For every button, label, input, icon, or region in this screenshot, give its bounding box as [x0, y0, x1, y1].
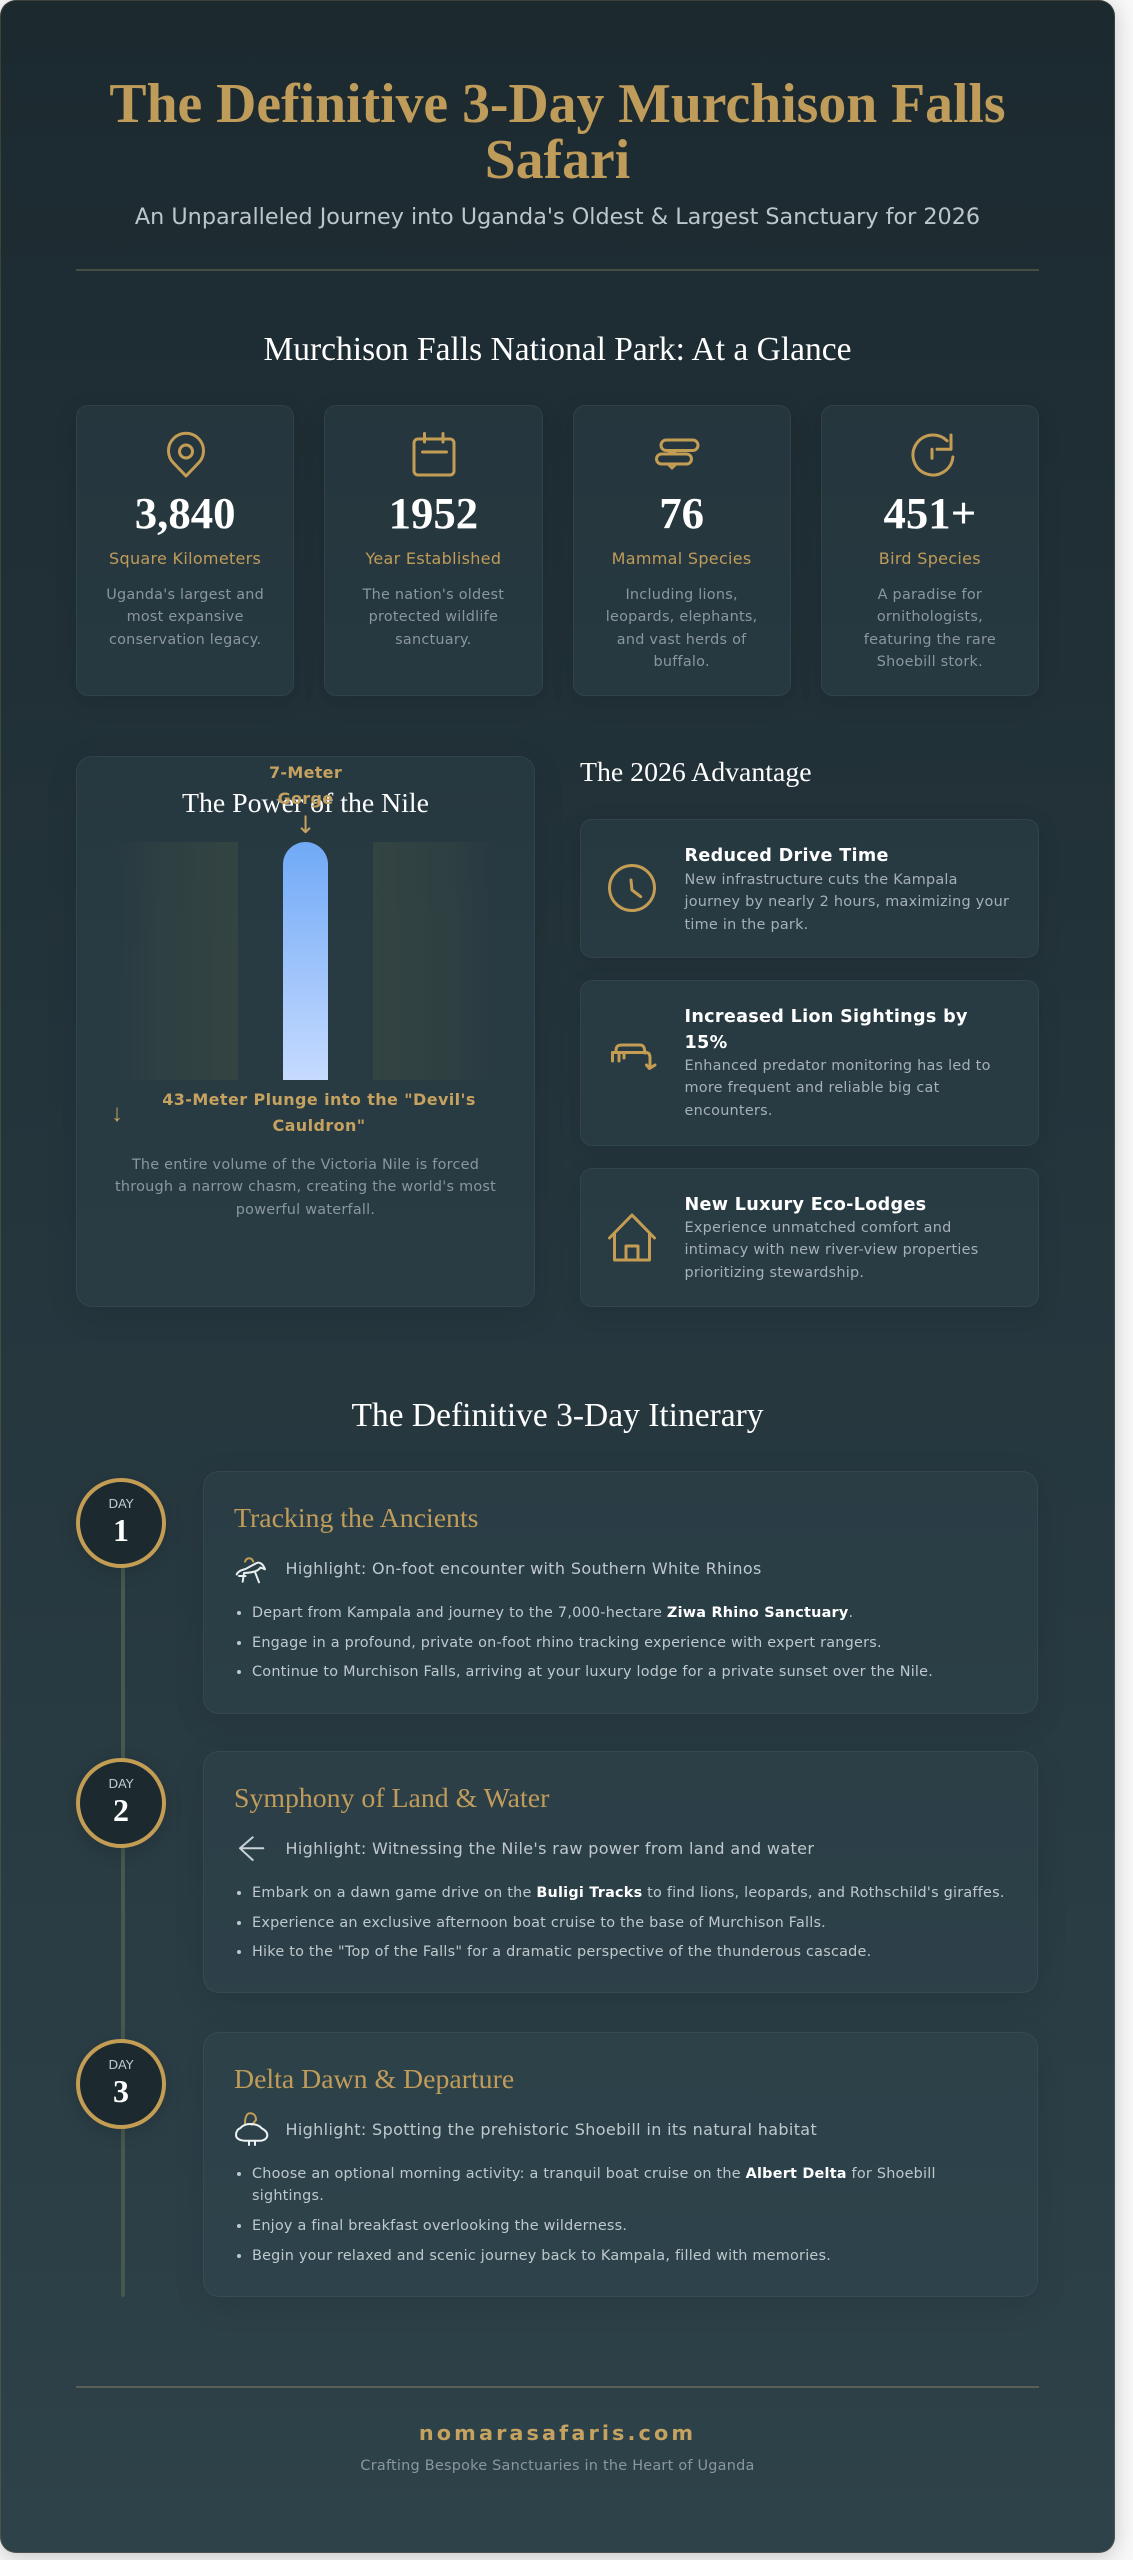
arrow: plunge down: ↓ — [111, 1100, 123, 1127]
stat description: buffalo. — [653, 654, 710, 670]
stat description — [362, 587, 504, 648]
timeline line — [121, 1560, 124, 2297]
stat description — [864, 587, 996, 670]
day caption: DAY — [108, 1777, 134, 1792]
stat description: Shoebill stork. — [877, 654, 983, 670]
advantage description — [684, 1220, 979, 1281]
advantage description: encounters. — [684, 1103, 773, 1119]
stat description: protected wildlife — [369, 609, 498, 625]
stat description: The nation's oldest — [363, 587, 504, 603]
activity list: Continue to Murchison Falls, arriving at your luxury lodge for a private sunset over the Nile. — [252, 1664, 933, 1680]
stat description: Including lions, — [625, 587, 738, 603]
highlight text: Highlight: On-foot encounter with Southern White Rhinos — [286, 1559, 762, 1578]
day title: Tracking the Ancients — [234, 1503, 478, 1534]
stat description: featuring the rare — [864, 632, 996, 648]
activity list: Embark on a dawn game drive on the Buligi Tracks to find lions, leopards, and Rothschild's giraffes. — [252, 1885, 1005, 1901]
icon: house — [608, 1213, 656, 1262]
icon: clock — [608, 864, 656, 912]
stat label: Bird Species — [879, 549, 981, 568]
timeline marker: day 1 — [76, 1478, 166, 1568]
stat description: Uganda's largest and — [106, 587, 264, 603]
panel: bird species stat — [821, 405, 1039, 696]
advantage description — [684, 1058, 991, 1119]
advantage description: prioritizing stewardship. — [684, 1265, 864, 1281]
stat number: 3,840 — [135, 488, 236, 538]
timeline marker: day 2 — [76, 1758, 166, 1848]
advantage title: Increased Lion Sightings by 15% — [684, 1007, 968, 1053]
panel: day 3 — [203, 2032, 1038, 2297]
panel: the power of the nile — [76, 756, 535, 1307]
timeline marker: day 3 — [76, 2039, 166, 2129]
icon: bird circular arrow — [911, 434, 954, 477]
description: nile: The entire volume of the Victoria Nile is forced — [132, 1157, 479, 1173]
advantage description: time in the park. — [684, 917, 808, 933]
footer: tagline: Crafting Bespoke Sanctuaries in the Heart of Uganda — [360, 2458, 755, 2474]
stat label: Square Kilometers — [109, 549, 261, 568]
day number: 3 — [113, 2073, 129, 2109]
panel: reduced drive time — [580, 819, 1039, 958]
label: 43-meter plunge: 43-Meter Plunge into the "Devil's — [162, 1090, 476, 1109]
activity list — [237, 1605, 933, 1680]
heading: at a glance: Murchison Falls National Park: At a Glance — [263, 331, 852, 368]
highlight text: Highlight: Spotting the prehistoric Shoebill in its natural habitat — [286, 2120, 817, 2139]
day number: 2 — [113, 1792, 129, 1828]
panel: year established stat — [324, 405, 542, 696]
panel: square kilometers stat — [76, 405, 294, 696]
title: The Definitive 3-Day Murchison Falls Safari — [109, 73, 1006, 191]
icon: stacked animal shape — [655, 438, 700, 470]
icon: shoebill cloud — [235, 2112, 268, 2146]
stat description: leopards, elephants, — [606, 609, 757, 625]
panel: day 1 — [203, 1471, 1038, 1714]
panel: day 2 — [203, 1751, 1038, 1993]
activity list: Choose an optional morning activity: a tranquil boat cruise on the Albert Delta for Shoebill — [252, 2166, 936, 2182]
advantage description — [684, 872, 1009, 933]
advantage description: intimacy with new river-view properties — [684, 1242, 979, 1258]
advantage description: New infrastructure cuts the Kampala — [684, 872, 958, 888]
icon: lion — [611, 1044, 657, 1070]
stat description — [106, 587, 264, 648]
stat description: conservation legacy. — [109, 632, 261, 648]
panel: new luxury eco-lodges — [580, 1168, 1039, 1307]
day caption: DAY — [108, 2058, 134, 2073]
activity list — [237, 2166, 936, 2264]
diagram: waterfall — [283, 842, 328, 1080]
day title: Delta Dawn & Departure — [234, 2064, 514, 2095]
stat number: 76 — [659, 488, 704, 538]
activity list: Experience an exclusive afternoon boat cruise to the base of Murchison Falls. — [252, 1915, 826, 1931]
heading: the 2026 advantage: The 2026 Advantage — [580, 757, 812, 788]
activity list: Enjoy a final breakfast overlooking the wilderness. — [252, 2218, 627, 2234]
description: nile: through a narrow chasm, creating the world's most — [115, 1179, 496, 1195]
day title: Symphony of Land & Water — [234, 1783, 549, 1814]
activity list: Engage in a profound, private on-foot rhino tracking experience with expert rangers. — [252, 1635, 882, 1651]
advantage description: Enhanced predator monitoring has led to — [684, 1058, 991, 1074]
panel: increased lion sightings — [580, 980, 1039, 1146]
activity list: Begin your relaxed and scenic journey back to Kampala, filled with memories. — [252, 2248, 831, 2264]
label: 7-meter gorge: 7-Meter — [269, 763, 342, 782]
icon: calendar — [412, 432, 456, 476]
icon: rhino — [236, 1557, 266, 1584]
label: 43-meter plunge: Cauldron" — [272, 1116, 366, 1135]
day number: 1 — [113, 1512, 129, 1548]
icon: map pin — [167, 432, 205, 478]
highlight text: Highlight: Witnessing the Nile's raw power from land and water — [286, 1839, 814, 1858]
stat description: and vast herds of — [617, 632, 746, 648]
stat description: sanctuary. — [395, 632, 472, 648]
diagram: right cliff — [373, 842, 499, 1080]
activity list: sightings. — [252, 2188, 324, 2204]
arrow: gorge down: ↓ — [295, 811, 316, 839]
description: nile — [115, 1157, 496, 1218]
subtitle: An Unparalleled Journey into Uganda's Oldest & Largest Sanctuary for 2026 — [135, 204, 980, 230]
stat number: 1952 — [389, 488, 478, 538]
activity list — [237, 1885, 1005, 1960]
day caption: DAY — [108, 1497, 134, 1512]
advantage description: more frequent and reliable big cat — [684, 1080, 940, 1096]
advantage description: journey by nearly 2 hours, maximizing your — [684, 894, 1009, 910]
stat description — [606, 587, 757, 670]
label: 7-meter gorge: Gorge — [278, 789, 333, 808]
stat description: ornithologists, — [877, 609, 983, 625]
advantage description: Experience unmatched comfort and — [684, 1220, 951, 1236]
panel: mammal species stat — [572, 405, 791, 696]
advantage title: New Luxury Eco-Lodges — [684, 1195, 926, 1215]
heading: power of the nile: The Power of the Nile — [182, 788, 429, 819]
label: 43-meter plunge — [162, 1090, 476, 1135]
stat label: Year Established — [365, 549, 501, 568]
diagram: left cliff — [112, 842, 238, 1080]
icon: arrow left — [239, 1836, 264, 1861]
activity list: Hike to the "Top of the Falls" for a dramatic perspective of the thunderous cascade. — [252, 1944, 871, 1960]
stat label: Mammal Species — [612, 549, 752, 568]
activity list: Depart from Kampala and journey to the 7,000-hectare Ziwa Rhino Sanctuary. — [252, 1605, 853, 1621]
stat number: 451+ — [884, 488, 976, 538]
footer: brand: nomarasafaris.com — [419, 2421, 696, 2445]
heading: itinerary: The Definitive 3-Day Itinerary — [351, 1397, 764, 1434]
advantage title: Reduced Drive Time — [684, 846, 889, 866]
stat description: most expansive — [127, 609, 244, 625]
label: 7-meter gorge — [269, 763, 342, 808]
stat description: A paradise for — [878, 587, 982, 603]
description: nile: powerful waterfall. — [236, 1202, 375, 1218]
